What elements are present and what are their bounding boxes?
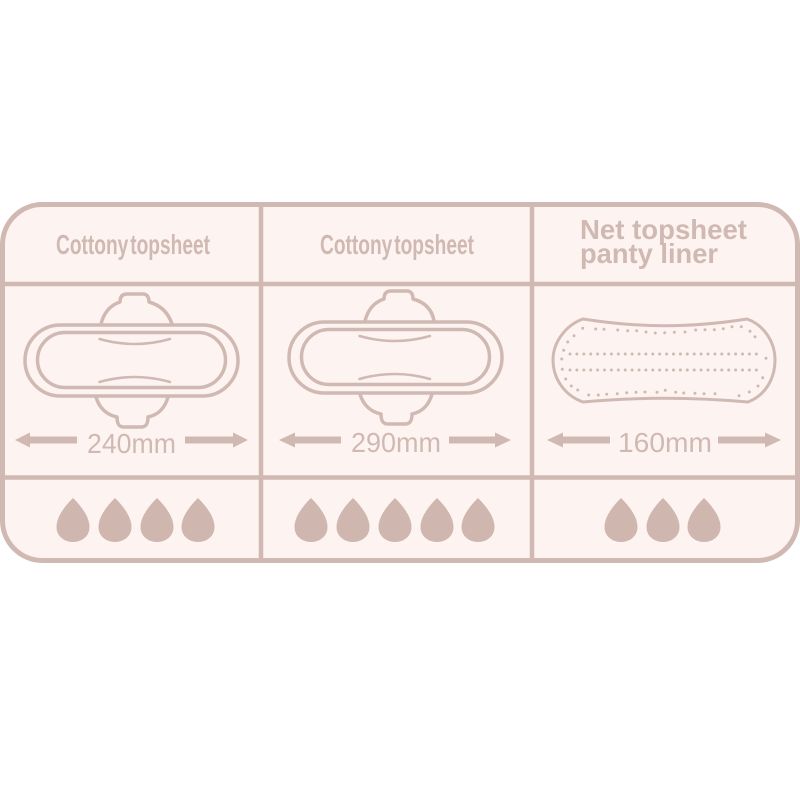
heading: column 3 net topsheet panty liner: panty liner: [580, 238, 718, 269]
arrow: right 290mm: [449, 432, 511, 448]
arrow: left 160mm: [547, 432, 610, 448]
arrow: left 290mm: [279, 432, 341, 448]
heading: column 2 cottony topsheet: Cottony topsheet: [320, 229, 474, 260]
label: 240mm: 240mm: [87, 428, 176, 459]
panel: comparison table: [2, 204, 798, 560]
heading: column 1 cottony topsheet: Cottony topsheet: [56, 229, 210, 260]
icon: sanitary pad 290mm: [289, 291, 502, 424]
arrow: right 240mm: [185, 432, 248, 448]
heading: column 3 net topsheet panty liner: Net topsheet: [580, 214, 747, 245]
icon: panty liner: [553, 319, 775, 402]
arrow: right 160mm: [718, 432, 781, 448]
icon: absorbency drops column 3: [604, 498, 720, 542]
label: 160mm: 160mm: [618, 427, 712, 458]
label: 290mm: 290mm: [351, 427, 441, 458]
heading: column 3 net topsheet panty liner: [580, 214, 747, 269]
icon: sanitary pad 240mm: [25, 294, 238, 427]
arrow: left 240mm: [15, 432, 77, 448]
icon: absorbency drops column 2: [294, 498, 494, 542]
icon: absorbency drops column 1: [56, 498, 214, 542]
